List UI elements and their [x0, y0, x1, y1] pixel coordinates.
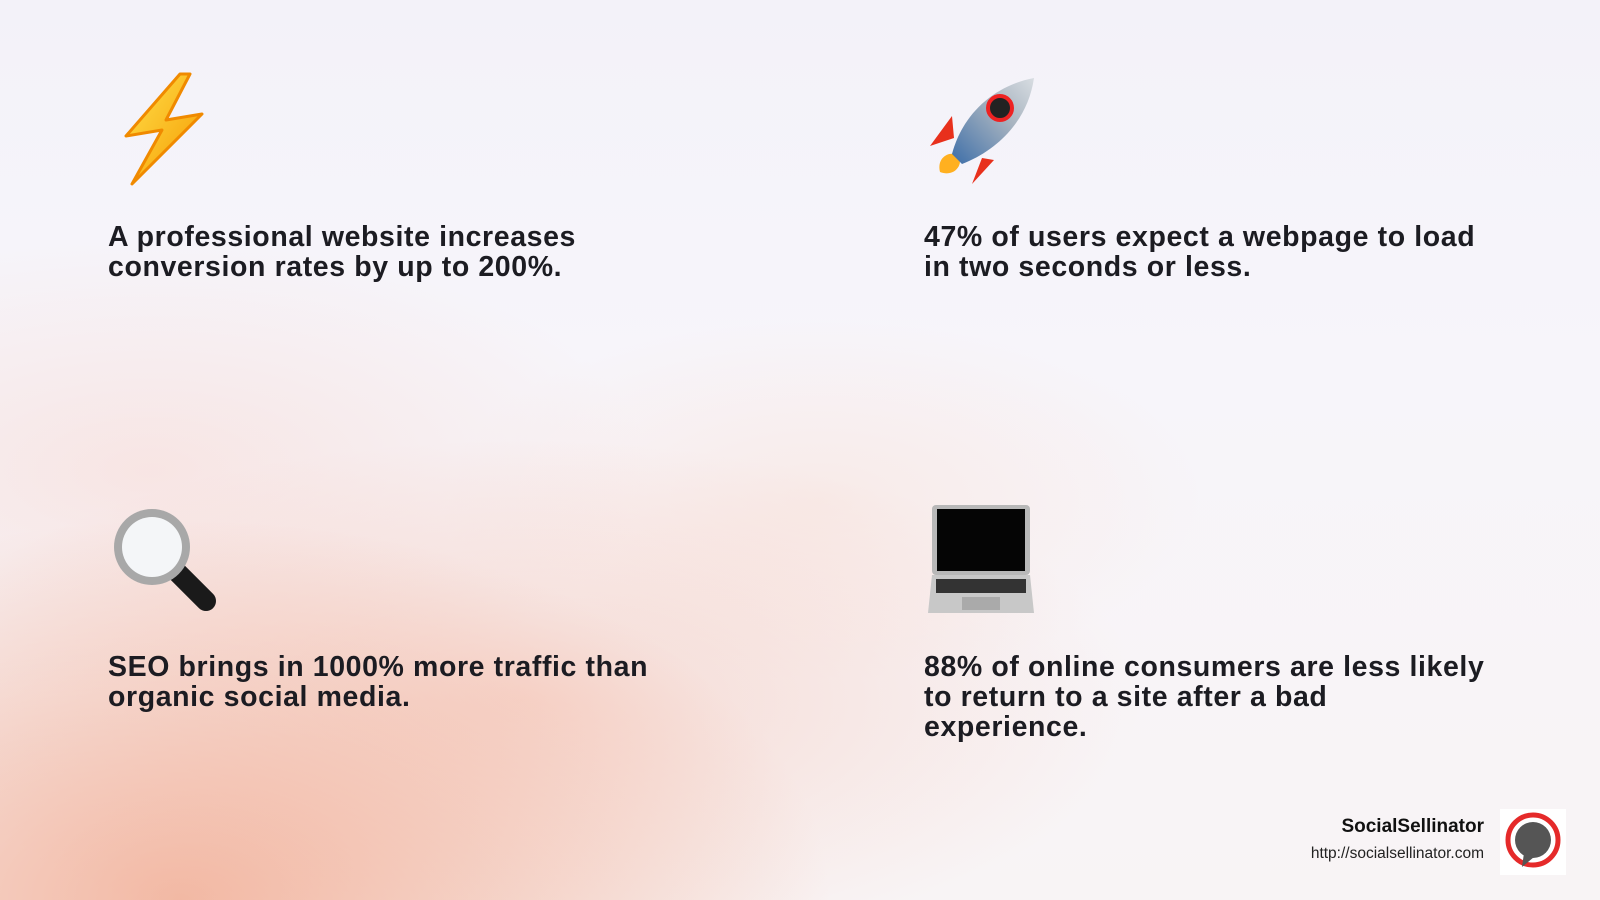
- icon: lightning: [124, 72, 204, 186]
- brand: http://socialsellinator.com: [1311, 845, 1484, 862]
- brand: SocialSellinator: [1341, 816, 1484, 837]
- logo: [1500, 809, 1566, 875]
- icon: laptop: [928, 505, 1034, 613]
- stat: SEO: SEO brings in 1000% more traffic than organic social media.: [108, 651, 648, 713]
- stat: bad experience: 88% of online consumers are less likely to return to a site after a bad experience.: [924, 651, 1484, 743]
- icon: rocket: [930, 78, 1034, 184]
- brand: [1311, 816, 1484, 862]
- stat: load time: 47% of users expect a webpage to load in two seconds or less.: [924, 221, 1475, 283]
- stat: conversion: A professional website increases conversion rates by up to 200%.: [108, 221, 576, 283]
- icon: magnifier: [114, 509, 216, 611]
